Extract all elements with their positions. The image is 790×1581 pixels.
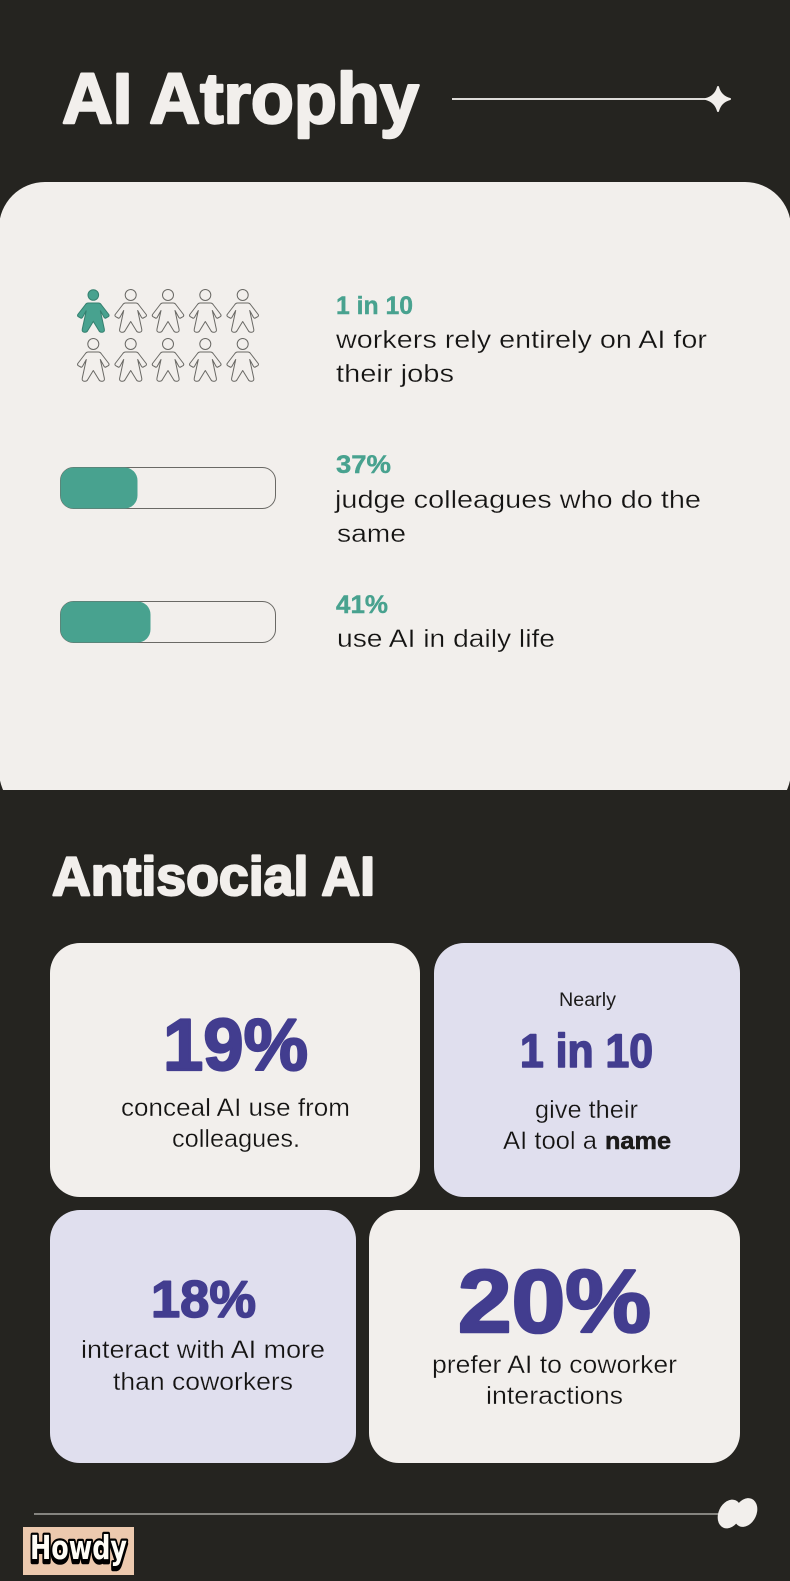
stat: 1 in 10 workers — [335, 292, 707, 388]
card: 19%: conceal AI use from — [121, 1094, 350, 1122]
card: 19% — [50, 943, 420, 1197]
stat: 37% judge colleagues: 37% — [336, 451, 391, 479]
progress bar: 37% — [60, 468, 276, 508]
stat: 37% judge colleagues: same — [337, 520, 406, 548]
card: 19%: colleagues. — [172, 1125, 300, 1153]
stat: 1 in 10 workers: their jobs — [336, 360, 454, 388]
stat: 37% judge colleagues — [334, 451, 701, 548]
panel: AI atrophy stats — [0, 182, 790, 817]
stat: 41% daily life: use AI in daily life — [337, 625, 555, 653]
arrow: title line with star — [452, 87, 730, 111]
card: 20%: interactions — [486, 1382, 623, 1410]
stat: 41% daily life — [336, 591, 555, 653]
card: nearly 1 in 10 — [434, 943, 740, 1197]
logo: Howdy — [23, 1527, 134, 1575]
stat: 1 in 10 workers: workers rely entirely on AI for — [335, 326, 707, 354]
card: 18%: interact with AI more — [81, 1336, 325, 1364]
card: 18%: 18% — [151, 1271, 256, 1329]
card: nearly 1 in 10: Nearly — [559, 990, 617, 1011]
progress bar: 41% — [60, 602, 276, 642]
card: 18% — [50, 1210, 356, 1463]
stat: 1 in 10 workers: 1 in 10 — [336, 292, 413, 320]
footer line with blob — [34, 1494, 762, 1532]
title: AI Atrophy — [62, 60, 419, 139]
icon: ten people, one highlighted — [78, 290, 258, 381]
card: 18%: than coworkers — [113, 1368, 293, 1396]
card: nearly 1 in 10: give their — [535, 1096, 638, 1124]
card: nearly 1 in 10: 1 in 10 — [520, 1024, 653, 1077]
card: 20% — [369, 1210, 740, 1463]
card: nearly 1 in 10: name — [605, 1128, 671, 1155]
card: nearly 1 in 10: AI tool a — [503, 1127, 597, 1155]
card: 20%: 20% — [458, 1251, 651, 1351]
logo: Howdy: Howdy — [30, 1528, 127, 1567]
card: 19%: 19% — [163, 1005, 308, 1086]
stat: 41% daily life: 41% — [336, 591, 388, 619]
heading: Antisocial AI: Antisocial AI — [52, 845, 375, 907]
stat: 37% judge colleagues: judge colleagues who do the — [334, 486, 701, 514]
card: 20%: prefer AI to coworker — [432, 1351, 677, 1379]
